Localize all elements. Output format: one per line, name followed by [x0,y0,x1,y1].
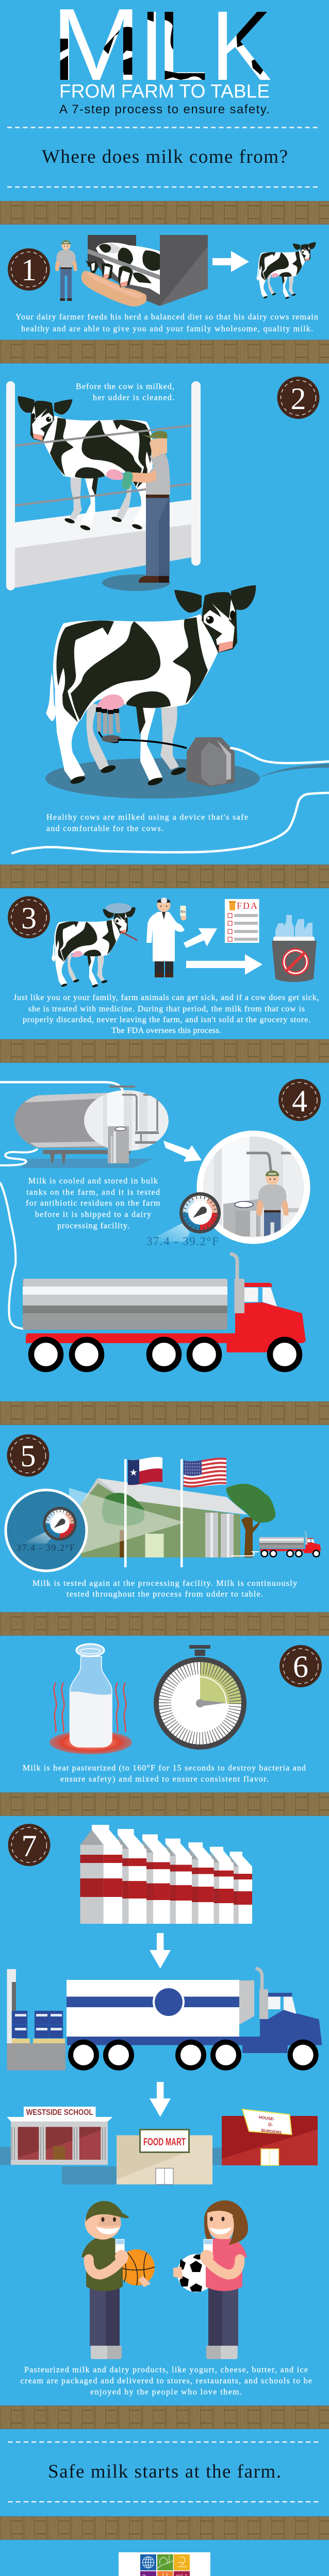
icon: veterinarian: Rx [181,910,186,914]
glass of milk [204,2239,212,2252]
temperature label: 37.4 - 39.2°F [17,1543,75,1553]
tree inside building [102,1493,144,1557]
badge 5 [7,1434,50,1477]
icon: Food Mart [117,2130,212,2184]
icon: milk cartons [80,1825,252,1924]
icon: cow with milking machine [45,585,329,799]
title block [59,9,271,116]
text: medicine and FDA: The FDA oversees this process. [111,1026,221,1035]
wood divider [0,2516,329,2540]
loading dock with pallets [7,1969,65,2070]
panel: step 2 milking [6,377,329,853]
badge 1: 1 [21,253,37,287]
badge 3: 3 [21,901,37,935]
text: medicine and FDA [13,993,319,1035]
icon: Food Mart: FOOD MART [143,2137,186,2148]
magnifier beam [69,1488,185,1557]
icon: US flag [180,1458,226,1567]
text: step 1 description: Your dairy farmer feeds his herd a balanced diet so that his dairy cows remain [15,313,318,321]
magnifier circle with farmer [197,1130,310,1244]
icon: veterinarian [146,897,187,977]
icon: farmer from the side [102,431,170,591]
rail [15,426,191,505]
text: delivery and enjoyment [21,2366,312,2397]
basketball [119,2249,155,2285]
arrow [212,251,249,272]
panel: step 3 medicine [8,896,319,1035]
text: delivery and enjoyment: cream are packaged and delivered to stores, restaurants, and schools to be [21,2377,312,2385]
hose to truck [0,1182,24,1329]
FDA checklist document: FDA [237,901,257,911]
badge 4 [278,1079,321,1121]
panel: step 1 feeding [8,235,318,333]
glass of milk [116,2239,124,2252]
subtitle: from farm to table: FROM FARM TO TABLE [59,80,270,102]
tree right [226,1484,275,1557]
silos [205,1513,234,1557]
building shadows [0,2147,222,2184]
panel: step 5 processing facility [6,1434,321,1599]
icon: milk bottle on burner [50,1644,132,1754]
icon: feeding stall with cows and hay [81,235,208,307]
text: storage and testing: Milk is cooled and stored in bulk [28,1177,158,1185]
panel: step 4 cooling [0,1079,321,1369]
icon: Texas flag [124,1457,162,1567]
text: udder is cleaned: Before the cow is milked, [76,382,174,391]
milk hose [12,748,329,853]
icon: girl with milk and soccer ball [173,2200,248,2359]
milking cups [96,707,121,742]
icon: bulk storage tank [14,1086,169,1168]
text: milking device: and comfortable for the cows. [46,824,163,833]
icon: Westside School [7,2107,113,2165]
logo: International Food Information Council Foundation [119,2552,210,2576]
text: medicine and FDA: properly discarded, never leaving the farm, and isn't sold at the grocery store. [23,1015,310,1024]
arrow down to stores [150,2082,171,2117]
icon: burger restaurant: HOUSE- [258,2115,275,2122]
icon: washing stall [6,381,201,590]
icon: boy with milk and basketball [81,2201,155,2359]
wood divider [0,201,329,225]
text: storage and testing: before it is shipped to a dairy [35,1210,151,1219]
text: storage and testing: for antibiotic residues on the farm [26,1199,160,1208]
panel: step 7 packaging and delivery [0,1824,322,2397]
wood divider [0,865,329,888]
icon: stopwatch [156,1645,244,1747]
text: testing at processor [32,1579,297,1599]
text: medicine and FDA: Just like you or your family, farm animals can get sick, and if a cow does get sick, [13,993,319,1002]
badge 1 [8,248,50,291]
milk hose into tank [0,1082,123,1090]
hose to pump [118,740,187,748]
badge 5: 5 [21,1439,36,1473]
text: storage and testing: tanks on the farm, and it is tested [26,1188,160,1197]
badge 6: 6 [293,1650,308,1684]
tagline: A 7-step process to ensure safety. [59,103,270,116]
arrow down to truck [150,1933,171,1969]
text: testing at processor: Milk is tested again at the processing facility. Milk is continuously [32,1579,297,1588]
hay pile [81,271,146,307]
panel: step 6 pasteurization [23,1644,322,1784]
icon: dairy delivery truck [67,1969,322,2068]
flags [124,1457,226,1567]
text: udder is cleaned [76,382,174,402]
wood divider [0,1039,329,1063]
icon: healthy cow [256,242,316,299]
temperature gauge [146,1192,221,1248]
icon: burger restaurant: BURGERS [261,2128,282,2136]
hose to truck [231,1552,259,1556]
text: udder is cleaned: her udder is cleaned. [93,394,174,402]
text: step 1 description: healthy and are able to give you and your family wholesome, quality milk. [21,325,313,333]
text: medicine and FDA: she is treated with medicine. During that period, the milk from that cow is [28,1005,305,1013]
icon: processing plant [81,1478,275,1557]
icon: milk tanker truck [23,1254,306,1369]
magnifier circle with gauge [6,1490,87,1571]
text: storage and testing [26,1177,160,1230]
text: delivery and enjoyment: Pasteurized milk and dairy products, like yogurt, cheese, butter, and ice [24,2366,308,2374]
text: storage and testing: processing facility. [57,1222,129,1230]
temperature label: 37.4 - 39.2°F [146,1235,219,1248]
soccer ball [177,2254,216,2292]
text: delivery and enjoyment: enjoyed by the people who love them. [90,2387,242,2397]
text: step 1 description [15,313,318,333]
logo squares [140,2554,190,2576]
FDA checklist document [225,899,259,943]
text: pasteurization: ensure safety) and mixed to ensure consistent flavor. [60,1775,269,1784]
wood divider [0,2405,329,2429]
icon: Texas flag: ★ [129,1467,138,1478]
badge 6 [279,1645,322,1687]
badge 7 [8,1824,51,1866]
heading: safe milk starts at the farm: Safe milk starts at the farm. [48,2461,281,2482]
icon: farmer [55,240,77,301]
icon: cow being cleaned [18,396,158,531]
stall partition [160,235,208,306]
badge 2 [277,377,320,419]
title: MILK in cow print [60,9,271,80]
icon: small tanker truck [259,1532,321,1557]
badge 7: 7 [22,1829,37,1863]
milking pump [187,737,235,787]
icon: Westside School: WESTSIDE SCHOOL [26,2108,93,2117]
arrow to discard bucket [186,954,262,975]
badge 2: 2 [291,382,306,416]
wood divider [0,1612,329,1636]
badge 4: 4 [292,1084,307,1118]
text: pasteurization [23,1764,306,1784]
icon: burger restaurant: O- [268,2122,273,2128]
wood divider [0,340,329,364]
arrow to FDA form [184,928,217,948]
wood divider [0,1792,329,1816]
text: testing at processor: tested throughout the process from udder to table. [67,1590,263,1599]
magnifier oval [84,1087,169,1154]
arrow to magnified view [163,1141,202,1162]
icon: burger restaurant [222,2109,318,2165]
text: pasteurization: Milk is heat pasteurized (to 160°F for 15 seconds to destroy bacteria and [23,1764,306,1772]
wood divider [0,1401,329,1425]
icon: discarded milk bucket [272,915,317,982]
icon: sick cow with thermometer [52,903,137,988]
text: milking device [46,813,248,833]
badge 3 [8,896,50,939]
text: milking device: Healthy cows are milked using a device that's safe [46,813,248,822]
heading: where does milk come from: Where does milk come from? [42,146,288,167]
hose squiggle [0,1149,38,1165]
